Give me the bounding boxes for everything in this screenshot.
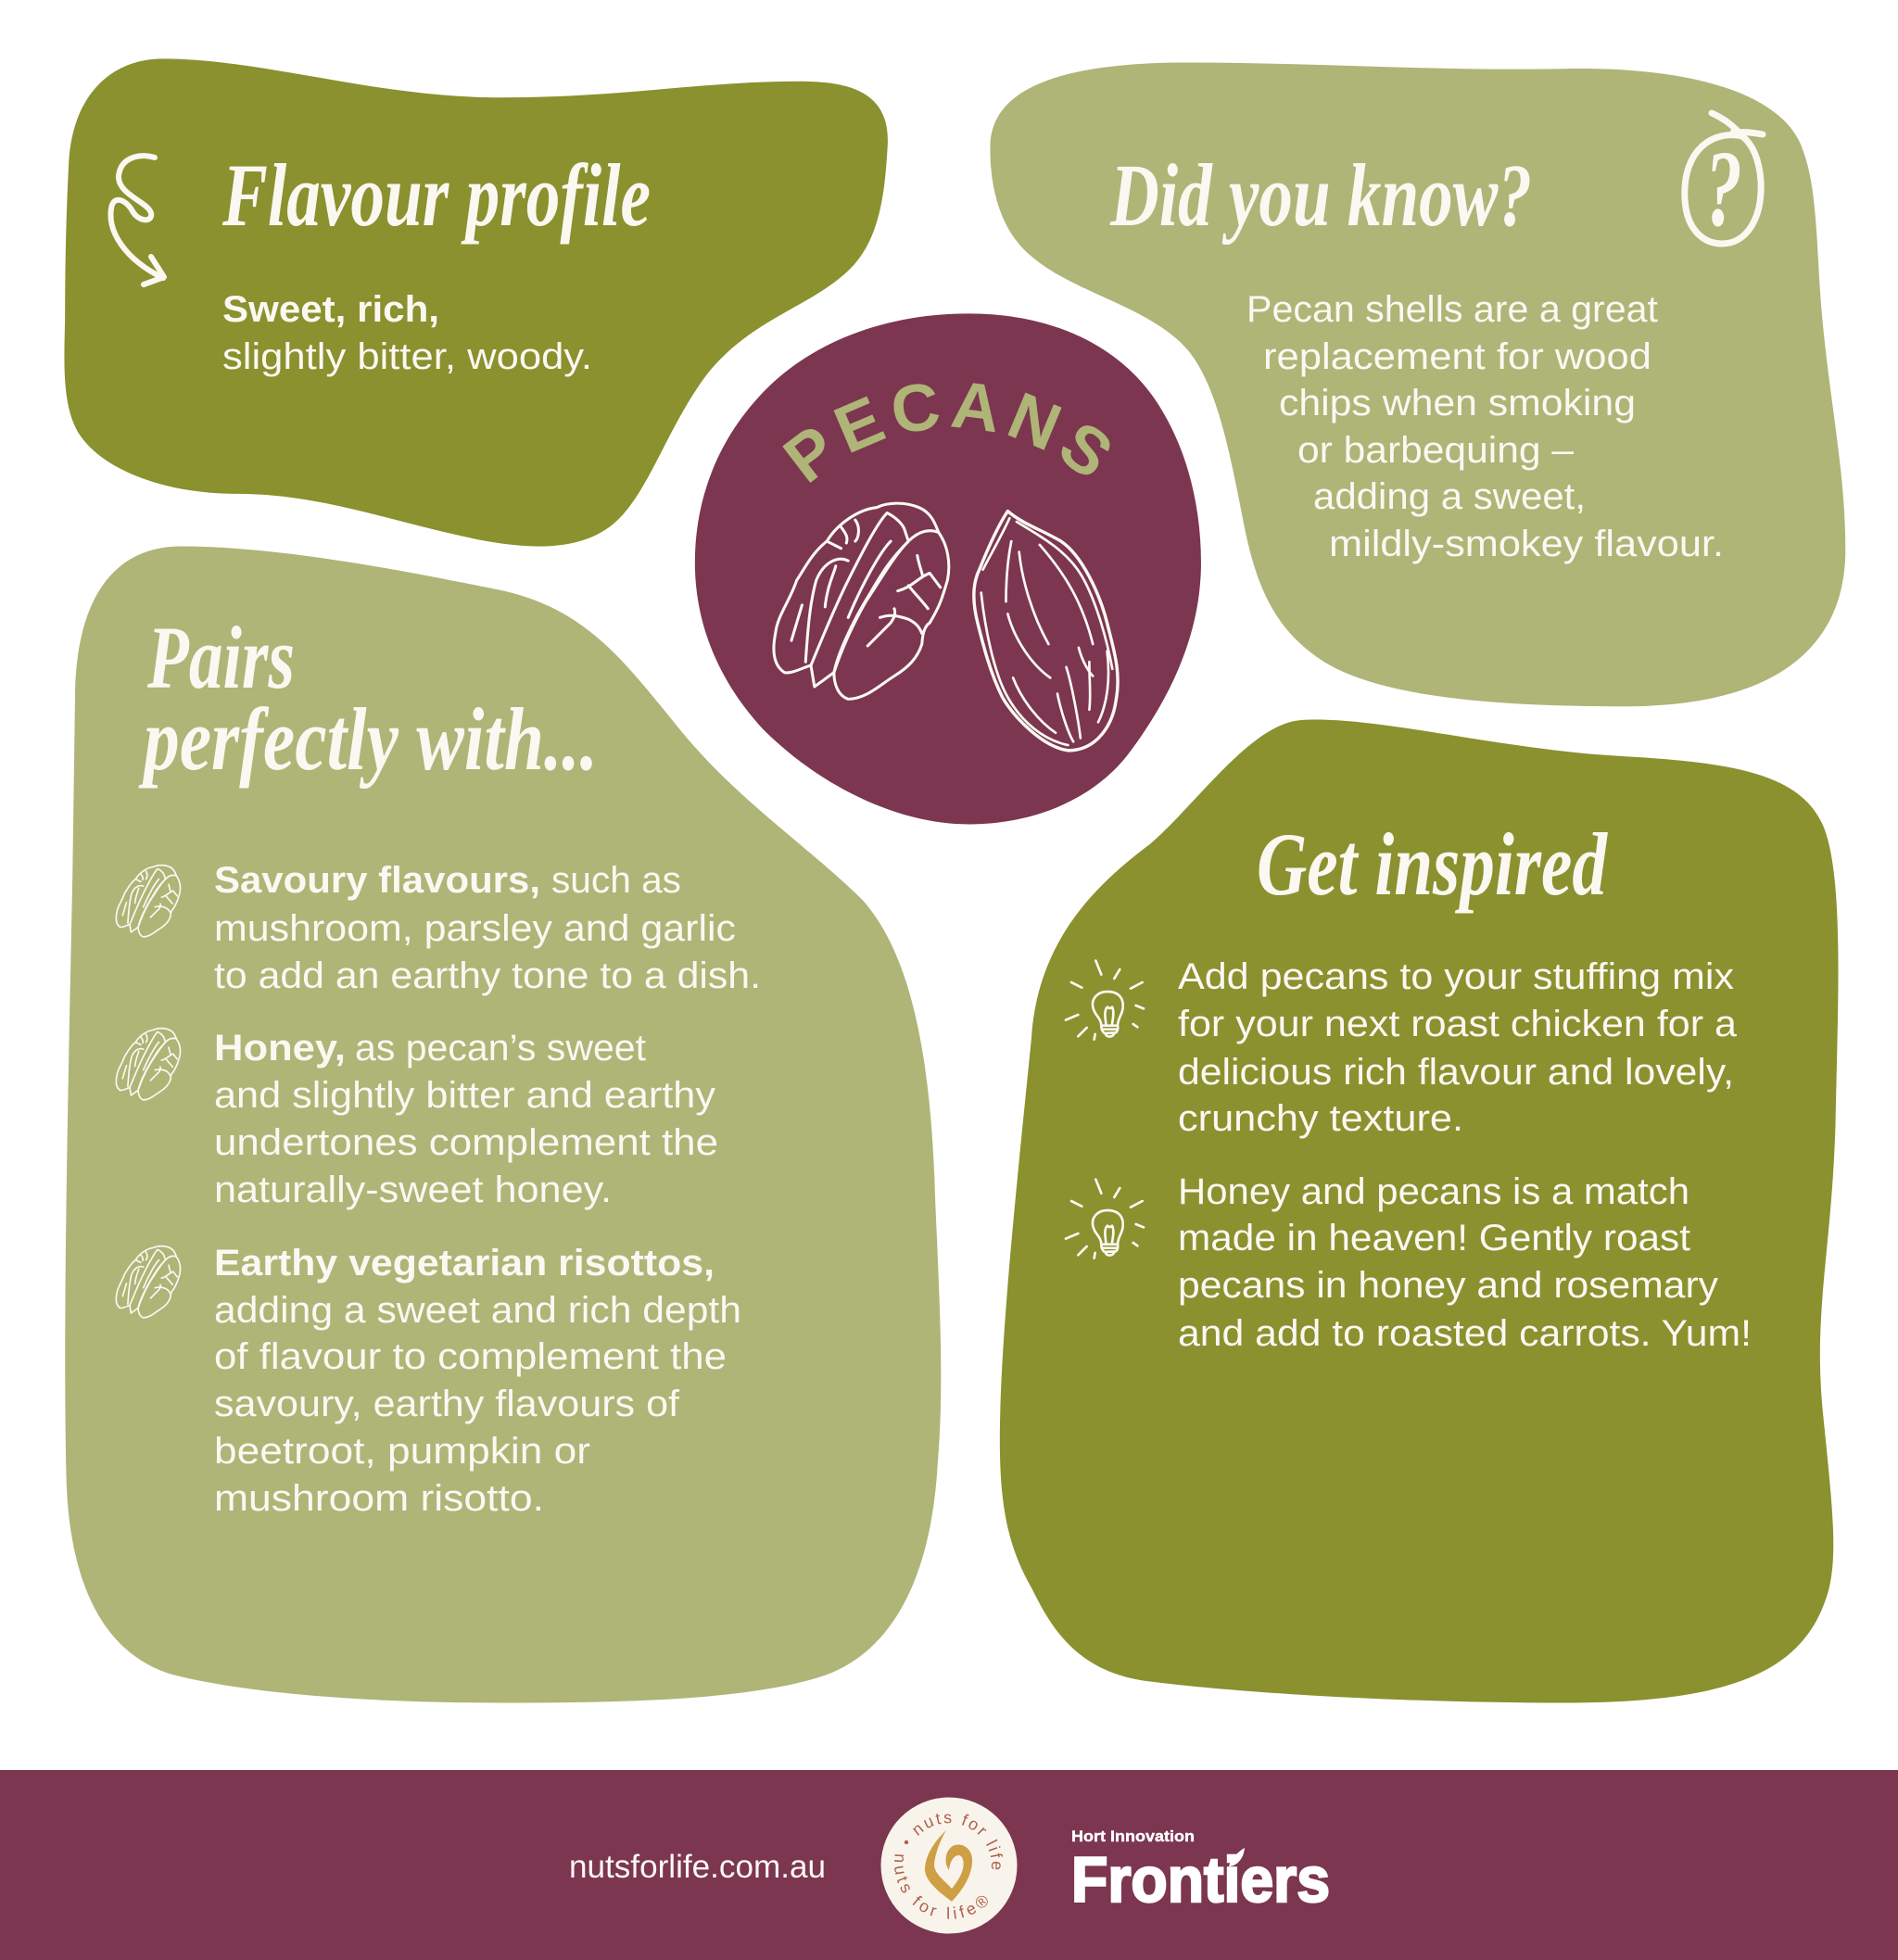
text: did you know body: replacement for wood [1263, 336, 1651, 377]
text: flavour description: slightly bitter, woody. [222, 336, 592, 377]
icon: light bulb stuffing [1066, 961, 1144, 1040]
text: honey: as pecan’s sweet [355, 1028, 646, 1069]
icon: light bulb honey [1066, 1180, 1144, 1258]
icon: curly arrow [110, 156, 164, 285]
heading: pairs perfectly with [138, 608, 598, 789]
heading: pairs perfectly with: perfectly with... [138, 689, 598, 789]
panel: get inspired [1000, 720, 1839, 1702]
text: earthy vegetarian risottos: Earthy vegetarian risottos, [214, 1243, 715, 1283]
text: did you know body: or barbequing – [1297, 430, 1574, 471]
icon: question mark nut: ? [1705, 128, 1742, 249]
icon: question mark nut [1685, 113, 1763, 249]
text: stuffing tip: Add pecans to your stuffing mix [1178, 956, 1734, 997]
logo: Hort Innovation Frontiers: Frontiers [1071, 1844, 1330, 1916]
text: stuffing tip: for your next roast chicken for a [1178, 1004, 1737, 1044]
text: honey: naturally-sweet honey. [214, 1170, 612, 1210]
title: PECANS: PECANS [782, 383, 1110, 483]
text: honey tip: made in heaven! Gently roast [1178, 1218, 1690, 1258]
text: earthy vegetarian risottos [214, 1243, 741, 1519]
text: stuffing tip: crunchy texture. [1178, 1098, 1463, 1139]
text: savoury flavours [214, 860, 761, 996]
icon: pecan risotto [116, 1246, 180, 1318]
text: honey tip: Honey and pecans is a match [1178, 1171, 1689, 1212]
text: flavour description [222, 289, 592, 377]
icon: pecan savoury [116, 866, 180, 937]
text: honey tip [1178, 1171, 1752, 1354]
text: earthy vegetarian risottos: savoury, earthy flavours of [214, 1384, 680, 1424]
text: honey tip: and add to roasted carrots. Yum! [1178, 1313, 1752, 1354]
heading: get inspired: Get inspired [1257, 815, 1609, 914]
icon: pecan shell [974, 512, 1118, 751]
text: honey: undertones complement the [214, 1122, 718, 1163]
text: did you know body: Pecan shells are a great [1246, 289, 1658, 330]
text: did you know body: adding a sweet, [1313, 476, 1586, 517]
logo: Hort Innovation Frontiers: Hort Innovation [1071, 1827, 1195, 1845]
text: did you know body [1246, 289, 1724, 564]
text: earthy vegetarian risottos: adding a sweet and rich depth [214, 1290, 741, 1331]
text: savoury flavours: such as [551, 860, 681, 901]
heading: flavour profile: Flavour profile [221, 145, 651, 245]
footer band [0, 1770, 1898, 1960]
icon: pecan kernel [774, 503, 949, 699]
logo: nuts for life: nuts for life [913, 1813, 1003, 1870]
text: stuffing tip: delicious rich flavour and lovely, [1178, 1052, 1734, 1093]
panel: pecans centre badge [695, 313, 1201, 825]
text: did you know body: mildly-smokey flavour. [1329, 524, 1724, 564]
text: earthy vegetarian risottos: of flavour to complement the [214, 1336, 727, 1377]
panel: pairs perfectly with [65, 547, 941, 1702]
icon: pecan honey [116, 1029, 180, 1100]
text: honey: Honey, [214, 1028, 346, 1069]
text: savoury flavours: mushroom, parsley and garlic [214, 908, 736, 949]
text: honey tip: pecans in honey and rosemary [1178, 1265, 1718, 1306]
heading: did you know: Did you know? [1109, 145, 1532, 245]
text: savoury flavours: Savoury flavours, [214, 860, 540, 901]
panel: flavour profile [64, 58, 888, 547]
logo: nuts for life [880, 1798, 1018, 1933]
text: earthy vegetarian risottos: mushroom risotto. [214, 1478, 544, 1519]
text: honey: and slightly bitter and earthy [214, 1075, 715, 1116]
text: earthy vegetarian risottos: beetroot, pumpkin or [214, 1431, 590, 1472]
text: savoury flavours: to add an earthy tone to a dish. [214, 955, 761, 996]
heading: pairs perfectly with: Pairs [146, 608, 295, 707]
text: honey [214, 1028, 718, 1210]
text: did you know body: chips when smoking [1279, 383, 1636, 424]
logo: nuts for life: nuts for life® [894, 1854, 988, 1919]
text: stuffing tip [1178, 956, 1737, 1139]
panel: did you know [990, 62, 1845, 706]
text: flavour description: Sweet, rich, [222, 289, 439, 330]
text: website: nutsforlife.com.au [569, 1849, 826, 1885]
